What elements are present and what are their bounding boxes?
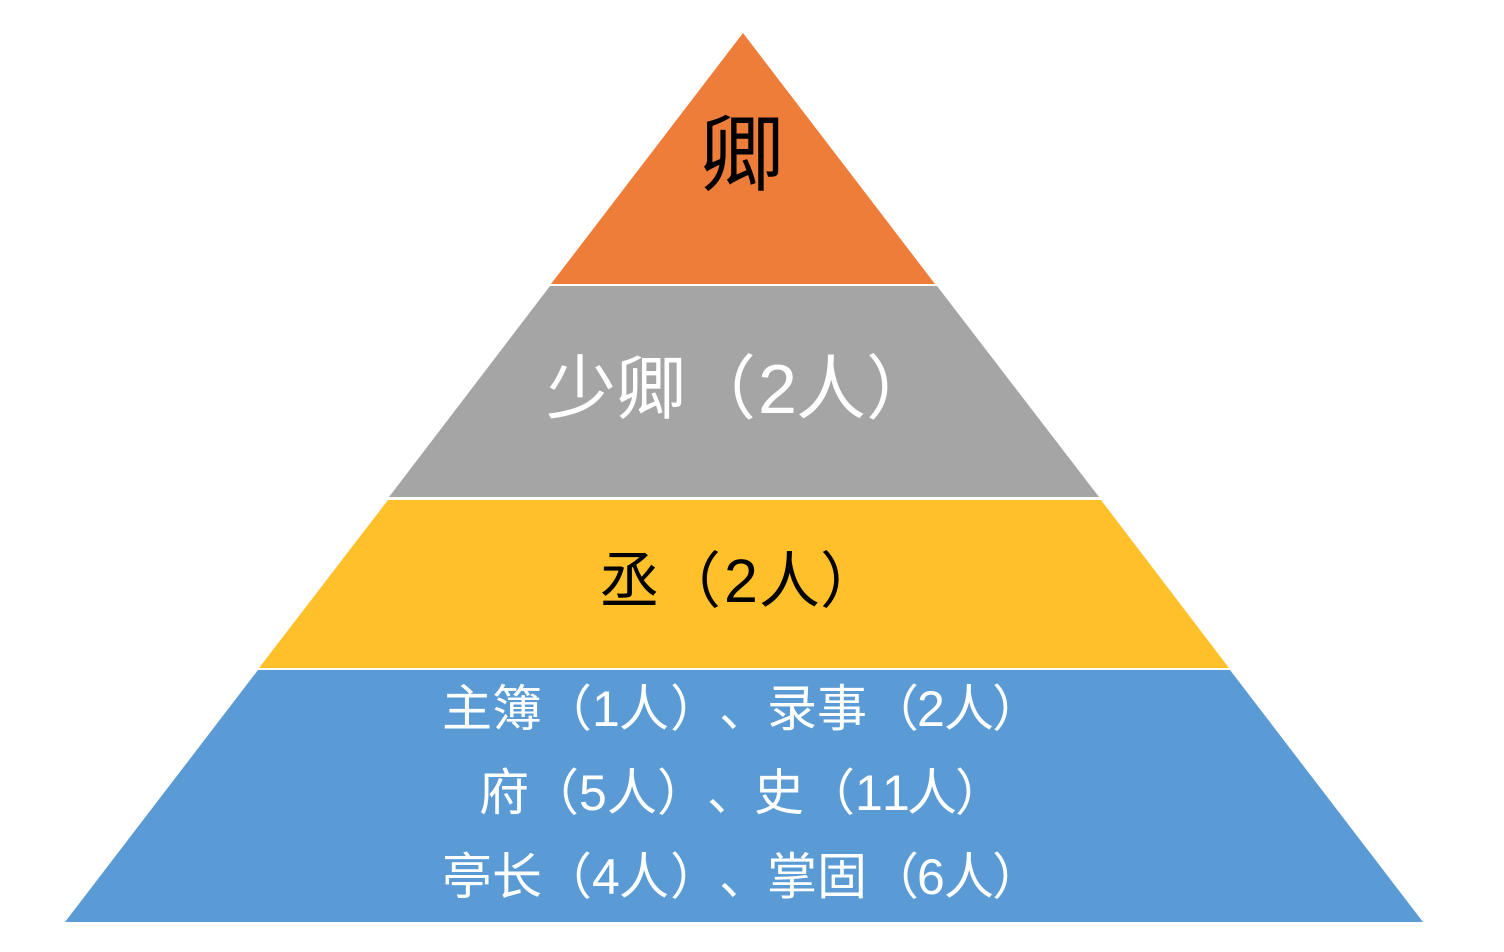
tier 3: 丞: 丞（2人） — [599, 547, 881, 615]
tier 1: 卿: 卿 — [700, 108, 784, 202]
tier 2: 少卿 — [389, 286, 1099, 497]
tier 1: 卿 — [551, 33, 935, 284]
tier 3: 丞 — [259, 500, 1229, 668]
tier 2: 少卿: 少卿（2人） — [546, 350, 936, 428]
tier 4: staff — [65, 670, 1423, 922]
staff line 3: 亭长（4人）、掌固（6人） — [442, 849, 1042, 905]
staff line 1: 主簿（1人）、录事（2人） — [442, 681, 1042, 737]
staff line 2: 府（5人）、史（11人） — [479, 765, 1005, 821]
